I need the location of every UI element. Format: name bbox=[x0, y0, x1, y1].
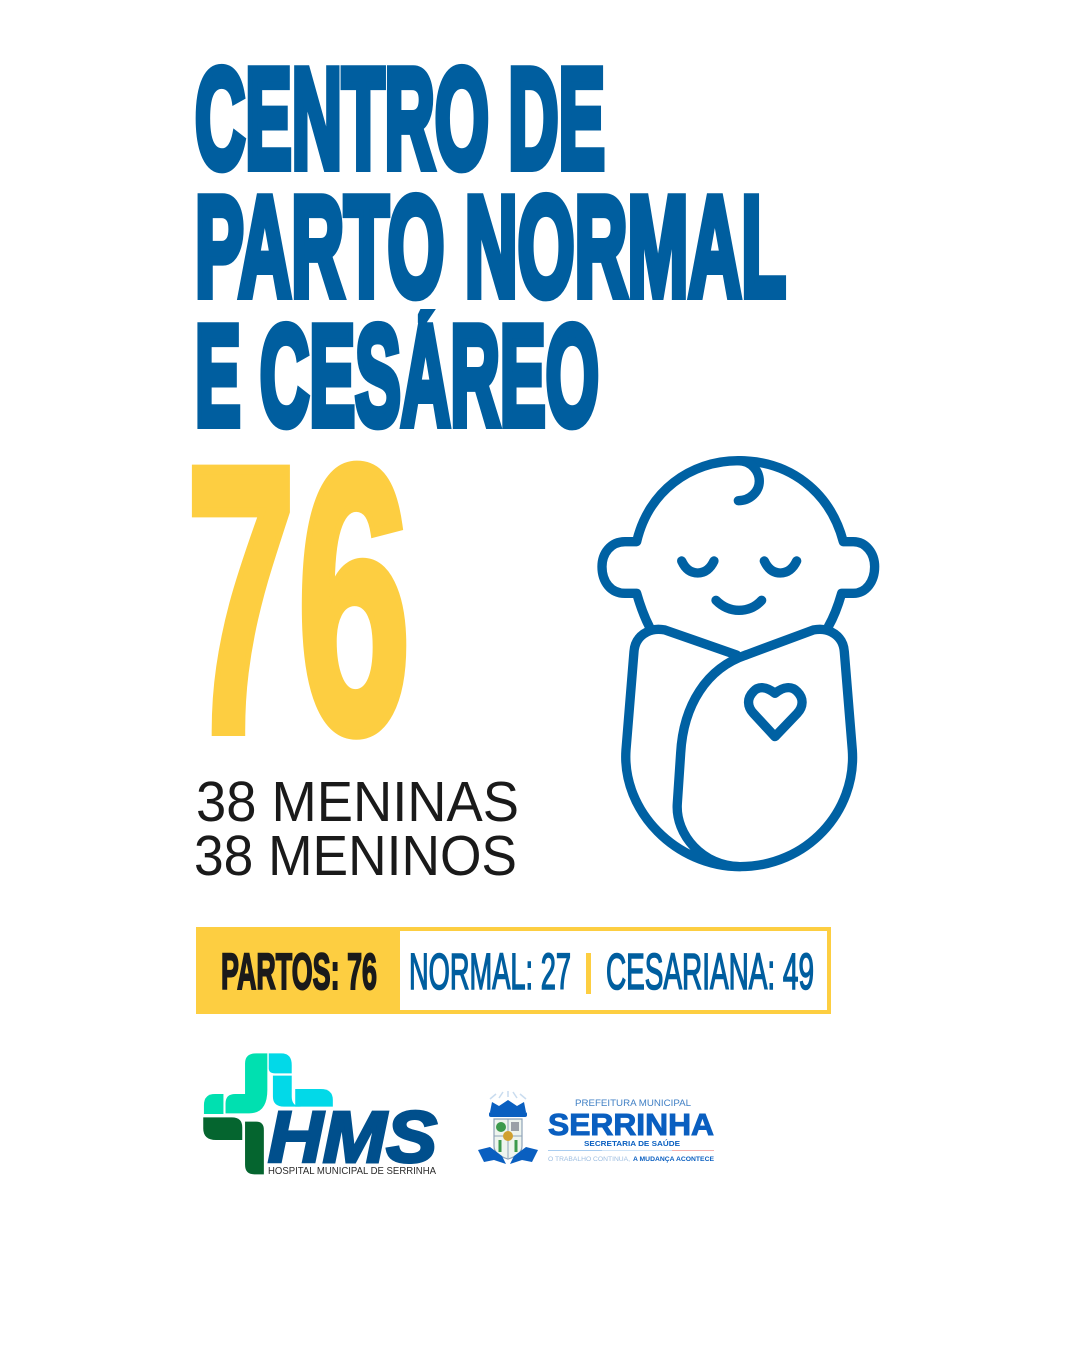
total births: PARTOS: 76 bbox=[221, 943, 377, 1000]
title bbox=[196, 64, 786, 430]
logo: Prefeitura Municipal de Serrinha: SERRINHA bbox=[548, 1107, 714, 1142]
title: CENTRO DE bbox=[195, 40, 605, 198]
cesarean births: CESARIANA: 49 bbox=[606, 943, 814, 1000]
big number 76: 7 bbox=[186, 387, 296, 812]
big number 76: 6 bbox=[297, 387, 411, 812]
logo: municipal coat of arms bbox=[478, 1091, 538, 1164]
logo: Prefeitura Municipal de Serrinha: PREFEITURA MUNICIPAL bbox=[575, 1098, 691, 1109]
logo: Prefeitura Municipal de Serrinha: O TRABALHO CONTINUA, bbox=[548, 1156, 630, 1163]
logo: Prefeitura Municipal de Serrinha: A MUDANÇA ACONTECE bbox=[633, 1156, 715, 1163]
icon: swaddled baby bbox=[602, 461, 875, 867]
births by sex: 38 MENINOS bbox=[194, 824, 517, 888]
births by sex bbox=[194, 770, 519, 888]
normal births: NORMAL: 27 bbox=[409, 943, 571, 1000]
hospital name: HOSPITAL MUNICIPAL DE SERRINHA bbox=[268, 1165, 436, 1177]
HMS wordmark: HMS bbox=[268, 1098, 437, 1178]
infographic canvas bbox=[192, 64, 880, 1174]
logo: Prefeitura Municipal de Serrinha bbox=[548, 1098, 715, 1163]
births by sex: 38 MENINAS bbox=[196, 770, 519, 834]
births summary bar bbox=[196, 927, 831, 1014]
logo: Prefeitura Municipal de Serrinha: SECRETARIA DE SAÚDE bbox=[584, 1139, 680, 1148]
title: E CESÁREO bbox=[195, 296, 599, 456]
logo: Hospital Municipal de Serrinha bbox=[203, 1053, 437, 1178]
